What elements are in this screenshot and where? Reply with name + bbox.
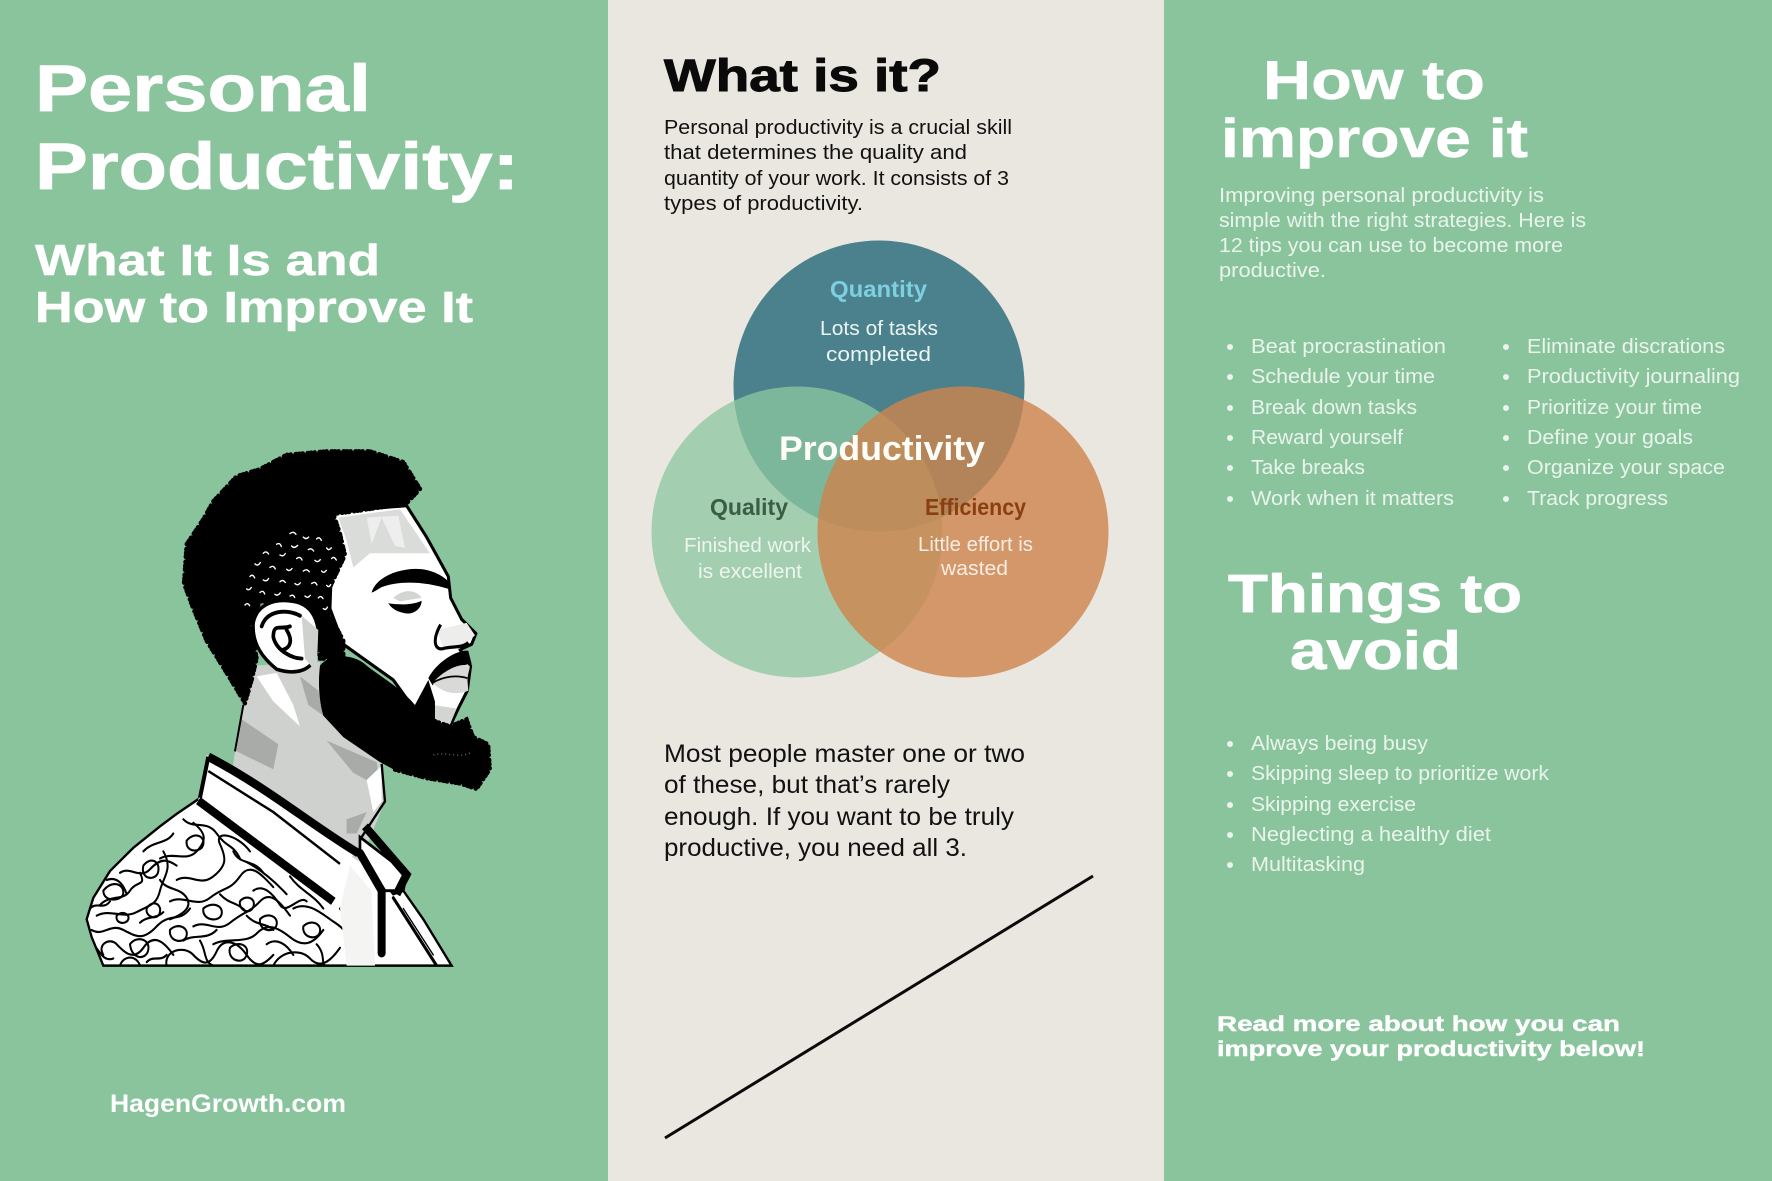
list: tips column two: Define your goals: [1527, 427, 1693, 449]
heading: what is it: What is it?: [664, 50, 941, 101]
closed eye: [388, 601, 422, 613]
panel: middle background: [608, 0, 1164, 1181]
list: tips column two: Track progress: [1527, 488, 1668, 510]
hair: [184, 451, 420, 703]
list: tips column one: Schedule your time: [1251, 366, 1435, 388]
list: tips column one: Break down tasks: [1251, 397, 1417, 419]
label: quality: Finished work: [684, 535, 812, 557]
text block: definition: that determines the quality and: [664, 141, 967, 164]
eyebrow: [372, 569, 450, 592]
beard: [319, 656, 490, 789]
list: things to avoid: Skipping sleep to prioritize work: [1251, 763, 1550, 785]
text block: master all three: productive, you need all 3.: [664, 834, 967, 862]
call to action: [1217, 1012, 1645, 1061]
circle: efficiency: [818, 386, 1108, 678]
heading: how to improve it: [1221, 49, 1528, 169]
subtitle: [35, 236, 473, 332]
list: tips column one: [1227, 336, 1454, 510]
label: quality: is excellent: [698, 561, 802, 583]
subtitle: How to Improve It: [35, 283, 473, 332]
list: tips column two: Organize your space: [1527, 457, 1725, 479]
label: quantity: Quantity: [830, 276, 927, 302]
list: things to avoid: Neglecting a healthy diet: [1251, 824, 1491, 846]
heading: how to improve it: How to: [1263, 49, 1485, 111]
face: [330, 506, 476, 726]
call to action: improve your productivity below!: [1217, 1037, 1645, 1061]
label: quantity: completed: [826, 344, 931, 366]
circle: quality: [652, 386, 942, 678]
title: Productivity:: [35, 129, 519, 203]
panel: right background: [1164, 0, 1772, 1181]
text block: definition: Personal productivity is a crucial skill: [664, 116, 1012, 139]
text block: definition: quantity of your work. It consists of 3: [664, 167, 1009, 190]
text block: improve intro: productive.: [1219, 260, 1326, 282]
illustration: man in profile: [87, 451, 490, 966]
list: tips column one: Take breaks: [1251, 457, 1365, 479]
list: tips column one: Work when it matters: [1251, 488, 1454, 510]
list: tips column two: [1503, 336, 1740, 510]
call to action: Read more about how you can: [1217, 1012, 1620, 1036]
panel: left background: [0, 0, 608, 1181]
label: efficiency: wasted: [940, 558, 1008, 580]
website label: HagenGrowth.com: [110, 1090, 346, 1118]
subtitle: What It Is and: [35, 236, 380, 285]
mouth: [428, 651, 472, 685]
nose: [435, 625, 468, 649]
text block: definition: [664, 116, 1012, 215]
label: efficiency: Little effort is: [918, 534, 1033, 556]
text block: improve intro: 12 tips you can use to become more: [1219, 235, 1563, 257]
label: quantity: Lots of tasks: [820, 318, 938, 340]
list: tips column two: Prioritize your time: [1527, 397, 1702, 419]
collar: [198, 755, 407, 966]
heading: things to avoid: Things to: [1228, 564, 1522, 624]
ear: [253, 601, 318, 673]
heading: things to avoid: avoid: [1290, 621, 1461, 681]
venn diagram: [652, 240, 1108, 678]
text block: master all three: of these, but that’s rarely: [664, 771, 951, 799]
text block: improve intro: simple with the right strategies. Here is: [1219, 210, 1586, 232]
label: quality: [684, 494, 812, 583]
label: quality: Quality: [710, 494, 788, 520]
list: tips column two: Eliminate discrations: [1527, 336, 1725, 358]
label: quantity: [820, 276, 938, 366]
neck: [232, 662, 385, 862]
list: tips column one: Beat procrastination: [1251, 336, 1446, 358]
heading: things to avoid: [1228, 564, 1522, 681]
text block: improve intro: Improving personal productivity is: [1219, 185, 1544, 207]
list: tips column two: Productivity journaling: [1527, 366, 1740, 388]
list: things to avoid: [1227, 733, 1550, 876]
text block: master all three: enough. If you want to be truly: [664, 803, 1015, 831]
label: efficiency: Efficiency: [925, 494, 1026, 520]
text block: improve intro: [1219, 185, 1586, 282]
shirt with brain pattern: [87, 798, 452, 966]
text block: master all three: [664, 740, 1025, 862]
list: things to avoid: Always being busy: [1251, 733, 1428, 755]
list: things to avoid: Multitasking: [1251, 854, 1365, 876]
diagonal line: [665, 876, 1093, 1138]
circle: quantity: [734, 240, 1024, 532]
heading: how to improve it: improve it: [1221, 107, 1528, 169]
list: things to avoid: Skipping exercise: [1251, 794, 1416, 816]
label: efficiency: [918, 494, 1033, 580]
title: [35, 51, 519, 203]
label: productivity: Productivity: [779, 430, 985, 468]
text block: definition: types of productivity.: [664, 192, 863, 215]
list: tips column one: Reward yourself: [1251, 427, 1403, 449]
text block: master all three: Most people master one or two: [664, 740, 1025, 768]
title: Personal: [35, 51, 371, 125]
